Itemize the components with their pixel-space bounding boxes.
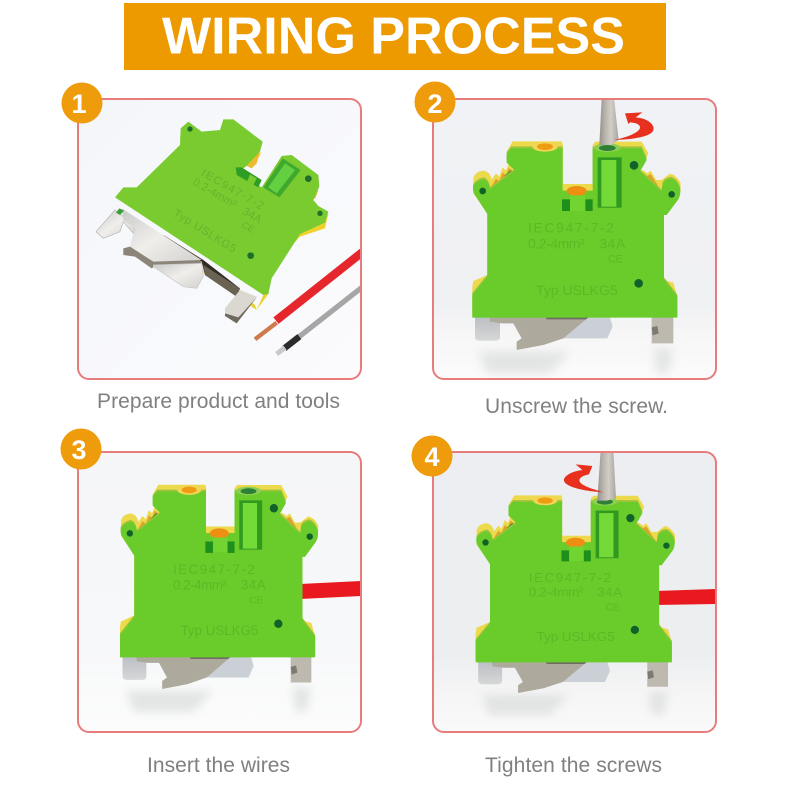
icon: screwdriver [597,450,616,501]
block markings: Typ USLKG5 [536,282,618,298]
arrow: clockwise rotation [564,464,604,492]
caption: step 1: Prepare product and tools [97,390,340,413]
block markings: CE [240,220,256,235]
panel: step 3 insert the wires [78,452,362,732]
green body [115,119,328,295]
block markings: CE [608,254,623,266]
badge: step 1: 1 [71,89,87,119]
red wire [255,250,365,339]
title: WIRING PROCESS [162,8,625,66]
block markings: 0.2-4mm² [173,577,227,592]
block markings [529,570,622,644]
block markings [173,562,266,638]
block markings: 0.2-4mm² [190,176,239,211]
panel: step 2 unscrew the screw [433,98,716,379]
red wire [655,589,717,605]
grey wire [277,285,365,354]
badge: step 2: 2 [427,89,443,119]
badge: step 2 [414,82,456,122]
block markings: IEC947-7-2 [529,570,611,585]
block markings: IEC947-7-2 [528,220,614,236]
block markings: Typ USLKG5 [171,207,238,256]
red wire [300,581,362,599]
arrow: counter-clockwise rotation [614,112,654,140]
badge: step 4: 4 [424,442,440,472]
panel: step 1 prepare product and tools [78,99,365,379]
icon: screwdriver [599,98,619,145]
block markings: Typ USLKG5 [181,623,258,638]
block markings: IEC947-7-2 [199,167,266,213]
photo: terminal block with wire and screwdriver [476,450,717,715]
yellow back layer [180,137,328,310]
panel border [78,99,361,379]
block markings: 34A [241,577,266,592]
panel border [433,99,716,379]
block markings: 0.2-4mm² [528,235,585,251]
block markings: CE [605,602,620,613]
photo: terminal block front view [472,98,681,373]
panel border [433,452,716,732]
photo: terminal block with inserted wire [120,485,362,712]
block markings: 34A [597,585,622,600]
block markings [175,169,264,252]
metal rail foot [96,208,257,323]
block markings: CE [249,595,263,607]
photo: angled terminal block with wires [96,119,365,354]
panel border [78,452,361,732]
caption: step 4: Tighten the screws [485,754,662,777]
badge: step 3: 3 [71,435,87,465]
caption: step 3: Insert the wires [147,754,290,777]
badge: step 3 [60,428,102,470]
block markings: Typ USLKG5 [537,629,615,644]
caption: step 2: Unscrew the screw. [485,395,668,418]
block markings: 34A [599,235,626,251]
panel: step 4 tighten the screws [433,450,717,732]
title banner [124,3,666,70]
block markings [528,220,626,298]
badge: step 1 [62,82,102,124]
badge: step 4 [412,436,452,476]
block markings: IEC947-7-2 [173,562,255,577]
block markings: 0.2-4mm² [529,585,584,600]
block markings: 34A [240,206,264,226]
